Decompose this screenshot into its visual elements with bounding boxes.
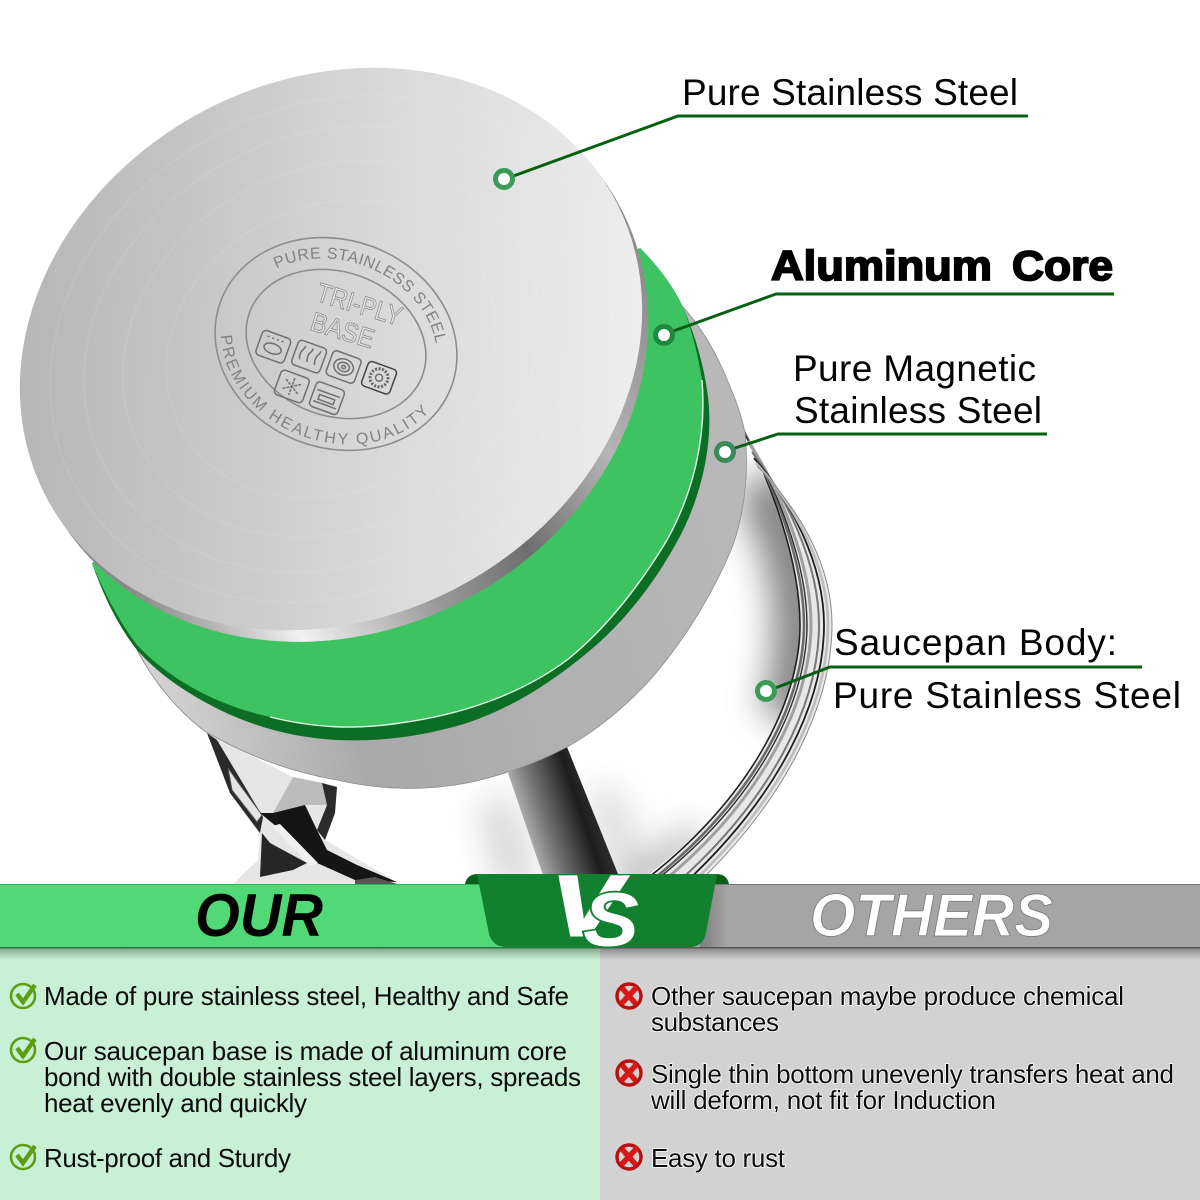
benefit 3: Rust-proof and Sturdy <box>44 1143 291 1173</box>
header: others <box>600 882 1200 949</box>
magnetic steel band <box>137 307 746 788</box>
callout: pure magnetic stainless steel: Pure Magnetic <box>793 348 1036 389</box>
emblem title: TRI-PLY <box>313 277 406 332</box>
emblem bottom text: PREMIUM HEALTHY QUALITY <box>221 336 426 446</box>
panel: others drawbacks <box>600 948 1200 1200</box>
benefit 2: Our saucepan base is made of aluminum core <box>44 1036 567 1066</box>
drawback 1: Other saucepan maybe produce chemical <box>651 981 1124 1011</box>
left handle <box>207 733 400 884</box>
stamped emblem <box>214 236 458 452</box>
vs badge: V <box>552 859 627 953</box>
icon: check 2 <box>11 1038 35 1062</box>
drawback 1: substances <box>651 1007 779 1037</box>
callout: aluminum core <box>656 242 1114 344</box>
header: others: OTHERS <box>810 882 1053 949</box>
benefit 2 <box>44 1036 581 1118</box>
vs badge: S <box>583 878 639 963</box>
saucepan rim <box>640 427 832 884</box>
benefit 1: Made of pure stainless steel, Healthy and Safe <box>44 981 569 1011</box>
emblem top text: PURE STAINLESS STEEL <box>273 247 446 343</box>
drawback 2: will deform, not fit for Induction <box>650 1085 996 1115</box>
icon: check 3 <box>11 1145 35 1169</box>
icon: cross 2 <box>617 1061 641 1085</box>
header: our: OUR <box>195 882 323 949</box>
emblem title: BASE <box>307 307 378 354</box>
panel: our benefits <box>0 948 600 1200</box>
callout: pure magnetic stainless steel: Stainless Steel <box>794 390 1042 431</box>
drawback 2 <box>650 1059 1174 1115</box>
right handle <box>508 747 622 884</box>
saucepan illustration <box>20 68 832 884</box>
callout: pure stainless steel <box>496 72 1028 188</box>
drawback 2: Single thin bottom unevenly transfers heat and <box>651 1059 1174 1089</box>
callout: saucepan body: Pure Stainless Steel <box>833 675 1181 716</box>
aluminum core <box>92 248 703 727</box>
aluminum core dark rim <box>92 248 709 740</box>
emblem icons <box>244 323 398 431</box>
header: our <box>0 882 600 949</box>
core highlight <box>270 380 703 727</box>
callout: pure stainless steel: Pure Stainless Steel <box>682 72 1018 113</box>
drawback 1 <box>651 981 1124 1037</box>
drawback 3: Easy to rust <box>651 1143 786 1173</box>
callout: saucepan body <box>758 622 1181 716</box>
emblem title <box>301 273 407 364</box>
callout: saucepan body: Saucepan Body: <box>834 622 1117 663</box>
icon: cross 1 <box>617 984 641 1008</box>
icon: check 1 <box>11 984 35 1008</box>
base disc <box>0 0 740 735</box>
saucepan body shading <box>495 480 802 890</box>
base disc rim <box>0 0 747 748</box>
icon: cross 3 <box>617 1145 641 1169</box>
benefit 2: bond with double stainless steel layers, spreads <box>44 1062 581 1092</box>
callout: aluminum core: Aluminum <box>771 242 992 289</box>
vs badge <box>465 859 729 963</box>
benefit 2: heat evenly and quickly <box>44 1088 307 1118</box>
brushed rings <box>0 1 700 697</box>
callout: aluminum core: Core <box>1012 242 1113 289</box>
callout: pure magnetic stainless steel <box>716 348 1047 460</box>
